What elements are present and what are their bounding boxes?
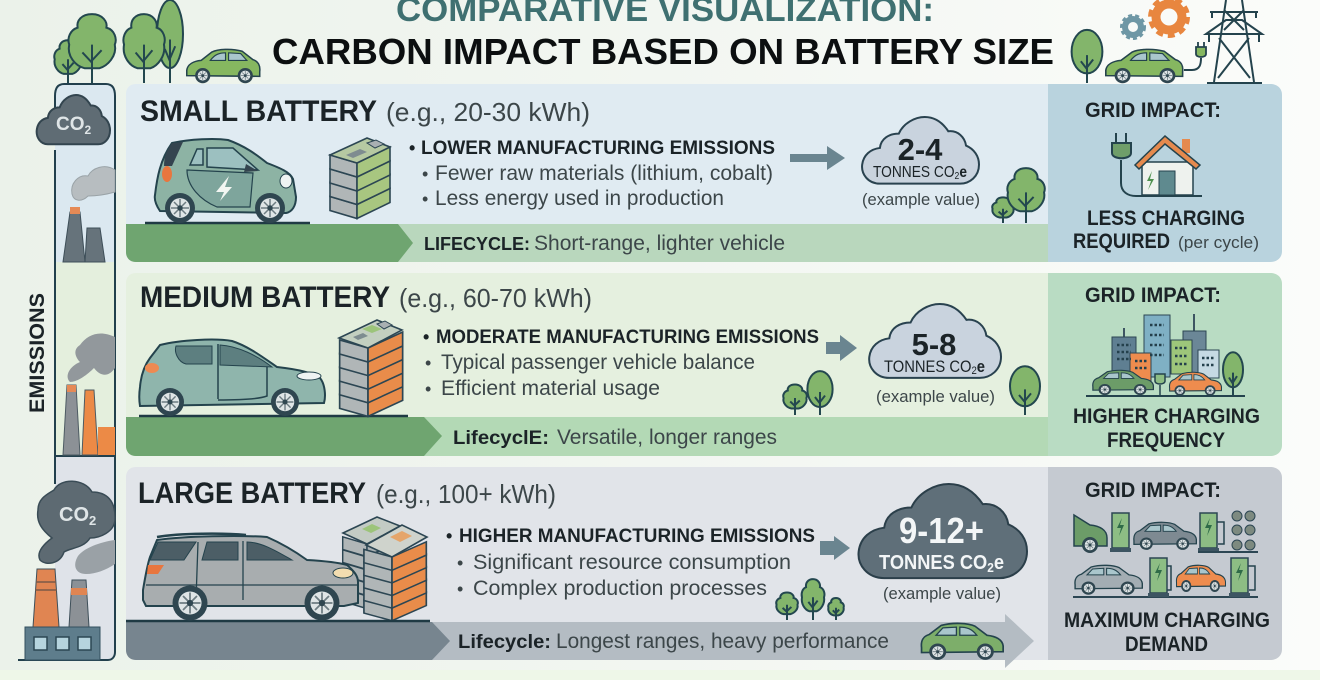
cloud: small 2-4 tonnes — [862, 117, 979, 184]
battery: large — [343, 517, 427, 621]
text: large battery bullets: • — [457, 579, 463, 599]
lifecycle strip: medium: LifecyclE: — [453, 428, 549, 449]
icon: charging stations — [1073, 511, 1258, 597]
text: medium battery bullets: Typical passenger vehicle balance — [441, 351, 755, 374]
heading: small battery: SMALL BATTERY — [140, 95, 377, 128]
heading size: large: (e.g., 100+ kWh) — [376, 479, 556, 509]
note: small: (example value) — [862, 190, 980, 209]
text: large battery bullets: • — [446, 526, 452, 546]
smoke bottom — [75, 540, 115, 574]
heading: large battery: LARGE BATTERY — [138, 477, 366, 510]
grid impact: small: LESS CHARGING — [1087, 207, 1245, 230]
emissions column — [18, 84, 115, 660]
CO2 cloud top: 2 — [84, 123, 92, 137]
top right scene: tree, gears, car, pylon — [1072, 0, 1262, 83]
title: CARBON IMPACT BASED ON BATTERY SIZE — [272, 31, 1054, 72]
CO2 cloud bottom: CO — [59, 504, 89, 526]
grid impact: large: GRID IMPACT: — [1085, 479, 1221, 502]
lifecycle strip: medium: Versatile, longer ranges — [557, 426, 777, 449]
battery: small — [330, 138, 390, 218]
panel: large battery — [126, 467, 1282, 668]
text: small battery bullets — [409, 138, 775, 210]
cloud: medium 5-8 tonnes: e — [977, 357, 985, 376]
grid impact: small: GRID IMPACT: — [1085, 99, 1221, 122]
cloud: small 2-4 tonnes: 2 — [955, 171, 960, 182]
lifecycle strip: small: LIFECYCLE: — [424, 234, 530, 254]
factory bottom — [25, 569, 100, 660]
grid impact: large: MAXIMUM CHARGING — [1064, 609, 1270, 632]
cloud: large 9-12+ tonnes: e — [994, 552, 1004, 574]
cloud: large 9-12+ tonnes: TONNES CO — [879, 552, 998, 574]
car: large — [126, 534, 430, 621]
text: medium battery bullets: Efficient material usage — [441, 377, 660, 400]
text: small battery bullets: • — [422, 164, 428, 184]
lifecycle strip: large: Lifecycle: — [458, 632, 551, 653]
text: small battery bullets: LOWER MANUFACTURING EMISSIONS — [421, 138, 775, 159]
arrow: small — [790, 146, 845, 170]
grid impact: small — [1073, 99, 1259, 253]
text: medium battery bullets: MODERATE MANUFACTURING EMISSIONS — [436, 327, 819, 348]
grid impact: medium — [1073, 284, 1260, 452]
cloud: large 9-12+ tonnes — [859, 484, 1027, 578]
title — [272, 0, 1054, 72]
grid impact: large — [1064, 479, 1270, 656]
grid impact: medium: GRID IMPACT: — [1085, 284, 1221, 307]
cloud: large 9-12+ tonnes: 2 — [987, 560, 994, 575]
trees: medium — [783, 366, 1040, 415]
CO2 cloud bottom — [38, 481, 115, 563]
heading size: medium: (e.g., 60-70 kWh) — [399, 283, 592, 313]
cloud: medium 5-8 tonnes: 2 — [971, 365, 977, 377]
smoke top — [72, 167, 115, 200]
battery: medium — [339, 320, 403, 416]
footer band — [0, 670, 1320, 680]
CO2 cloud top: CO — [56, 114, 84, 135]
CO2 cloud top — [37, 95, 110, 144]
text: large battery bullets: HIGHER MANUFACTURING EMISSIONS — [459, 526, 815, 547]
text: small battery bullets: • — [422, 189, 428, 209]
cloud: small 2-4 tonnes: 2-4 — [898, 132, 943, 167]
lifecycle strip: large: Longest ranges, heavy performance — [556, 630, 889, 653]
grid impact: medium: FREQUENCY — [1107, 429, 1225, 452]
cloud: small 2-4 tonnes: TONNES CO — [873, 164, 968, 181]
lifecycle strip: medium — [126, 417, 1048, 456]
chimneys middle — [63, 385, 115, 455]
text: medium battery bullets — [423, 327, 819, 400]
grid impact: small: (per cycle) — [1178, 233, 1259, 252]
panel: medium battery — [126, 273, 1282, 456]
panel: small battery — [126, 84, 1282, 262]
chimneys top — [63, 207, 105, 262]
cloud: small 2-4 tonnes: e — [959, 164, 967, 181]
trees: large — [776, 579, 844, 620]
arrow: large — [820, 536, 850, 560]
top left scene: trees and car — [54, 0, 260, 83]
note: medium: (example value) — [876, 387, 995, 406]
text: small battery bullets: Less energy used in production — [435, 187, 724, 210]
text: small battery bullets: Fewer raw materials (lithium, cobalt) — [435, 162, 773, 185]
grid impact: small: REQUIRED — [1073, 230, 1170, 253]
icon: city with cars — [1086, 314, 1245, 396]
lifecycle strip: large — [126, 614, 1034, 668]
lifecycle strip: small: Short-range, lighter vehicle — [534, 232, 785, 255]
car: small — [145, 139, 310, 223]
cloud: large 9-12+ tonnes: 9-12+ — [899, 510, 984, 551]
heading size: small: (e.g., 20-30 kWh) — [386, 97, 590, 127]
text: large battery bullets: Significant resource consumption — [473, 551, 791, 574]
trees: small — [992, 168, 1045, 223]
car: green on lifecycle arrow — [921, 623, 1003, 660]
cloud: medium 5-8 tonnes: TONNES CO — [884, 357, 985, 376]
grid impact: large: DEMAND — [1125, 633, 1208, 656]
text: large battery bullets — [446, 526, 815, 600]
cloud: medium 5-8 tonnes: 5-8 — [912, 327, 956, 362]
label: emissions: EMISSIONS — [26, 293, 49, 413]
cloud: medium 5-8 tonnes — [869, 304, 1001, 378]
icon: plug and house — [1112, 133, 1202, 196]
lifecycle strip: small — [126, 224, 1048, 262]
text: medium battery bullets: • — [425, 379, 431, 399]
grid impact: medium: HIGHER CHARGING — [1073, 405, 1260, 428]
car: medium — [139, 340, 408, 416]
text: small battery bullets: • — [409, 138, 415, 158]
arrow: medium — [826, 335, 857, 361]
CO2 cloud bottom: 2 — [89, 513, 96, 528]
text: large battery bullets: Complex production processes — [473, 577, 767, 600]
note: large: (example value) — [883, 584, 1001, 603]
text: medium battery bullets: • — [423, 327, 429, 347]
text: medium battery bullets: • — [425, 353, 431, 373]
smoke middle — [68, 334, 115, 382]
text: large battery bullets: • — [457, 553, 463, 573]
heading: medium battery: MEDIUM BATTERY — [140, 281, 390, 314]
